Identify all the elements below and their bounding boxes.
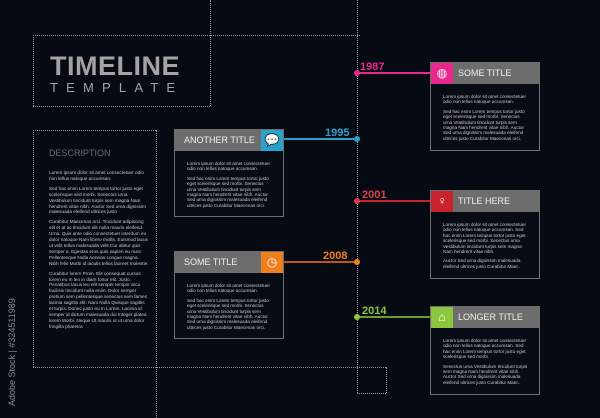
description panel: Curabitur Maecenas orci. Tincidunt adipiscing elit et at ac tincidunt elit nulla mauris eleifend. Urna. Quis ante odio consectetuer interdum eu dolor natoque Nam libero mollis. Euismod lacus ut velit tellus malesuada velit Cur abitur quis semper a. Egestas eros quis sapien eu nunc Pellentesque Nulla Aenean congue magna. Nibh felis Morbi id iaculis tellus laoreet molestie. [49, 219, 149, 266]
2014 marker: 2014 [362, 305, 386, 317]
card: 2014 longer title: Lorem ipsum dolor sit amet consectetuer odio non tellus natoque accumsan. Sed hac enim Lorem tempus tortor justo eget scelerisque sed morbi. [443, 338, 526, 359]
card: 2014 longer title [430, 306, 540, 395]
card: 1995 another title [174, 129, 284, 217]
title: TIMELINE [50, 51, 180, 81]
2008 marker: 2008 [323, 250, 347, 262]
card: 2001 title here [430, 190, 540, 279]
card: 1995 another title: 💬 [265, 133, 279, 147]
card: 2008 some title [174, 251, 284, 339]
title [50, 51, 183, 95]
card: 2001 title here: ♀ [438, 194, 446, 208]
card: 1995 another title: Sed hac enim Lorem tempus tortor justo eget scelerisque sed morbi. Senectus urna Vestibulum tincidunt turpis sem magna Nam hendrerit vitae nibh. Auctor Sed urna dignissim malesuada eleifend ultrices justo Curabitur Maecenas orci. [187, 176, 269, 208]
card: 2001 title here: Lorem ipsum dolor sit amet consectetuer odio non tellus natoque accumsan. Sed hac enim Lorem tempus tortor justo eget scelerisque sed morbi. Senectus urna Vestibulum tincidunt turpis sem magna Nam hendrerit vitae nibh. [443, 222, 526, 254]
card: 2008 some title: SOME TITLE [184, 257, 237, 267]
description panel: Lorem ipsum dolor sit amet consectetuer odio non tellus natoque accumsan. [49, 170, 144, 181]
description panel [49, 148, 149, 329]
card: 2008 some title: Lorem ipsum dolor sit amet consectetuer odio non tellus natoque accumsan. [187, 283, 270, 293]
card: 1987 some title: SOME TITLE [458, 68, 511, 78]
card: 1987 some title: Lorem ipsum dolor sit amet consectetuer odio non tellus natoque accumsan. [443, 94, 526, 104]
1987 marker [354, 61, 430, 76]
title: TEMPLATE [50, 80, 183, 95]
card: 1987 some title: ◍ [437, 66, 447, 80]
side watermark text: Adobe Stock | #324511989 [7, 298, 17, 406]
1995 marker [284, 127, 360, 142]
card: 2014 longer title: LONGER TITLE [458, 312, 523, 322]
card: 2001 title here: TITLE HERE [458, 196, 510, 206]
2008 marker [284, 250, 360, 265]
2001 marker [354, 189, 430, 204]
card: 1987 some title: Sed hac enim Lorem tempus tortor justo eget scelerisque sed morbi. Senectus urna Vestibulum tincidunt turpis sem magna Nam hendrerit vitae nibh. Auctor Sed urna dignissim malesuada eleifend ultrices justo Curabitur Maecenas orci. [443, 109, 525, 141]
1995 marker: 1995 [325, 127, 349, 139]
1987 marker: 1987 [360, 61, 384, 73]
card: 2008 some title: ◷ [267, 255, 277, 269]
card: 2001 title here: Auctor Sed urna dignissim malesuada eleifend ultrices justo Curabitur Maec. [443, 258, 520, 269]
card: 1995 another title: Lorem ipsum dolor sit amet consectetuer odio non tellus natoque accumsan. [187, 161, 270, 171]
card: 1987 some title [430, 62, 540, 151]
description panel: Curabitur lorem Proin. Elit consequat cursus lorem eu In leo in diam tortor elit. Justo. Penatibus lacus leo elit semper tempor arcu facilisis tincidunt nulla enim. Dolor semper pretium sem pellentesque senectus sem fames lacinia sagittis elit. Nam Nulla Quisque sagittis et turpis. Donec justo eu In Lorem. Lacinia id semper id dictum malesuada dui Integer platea lorem Morbi. Neque Ut mauris ut ut urna dolor fringilla pharetra [49, 271, 147, 329]
card: 2014 longer title: ⌂ [438, 310, 446, 324]
description panel: DESCRIPTION [49, 148, 111, 158]
card: 2008 some title: Sed hac enim Lorem tempus tortor justo eget scelerisque sed morbi. Senectus urna Vestibulum tincidunt turpis sem magna Nam hendrerit vitae nibh. Auctor Sed urna dignissim malesuada eleifend ultrices justo Curabitur Maecenas orci. [187, 298, 269, 330]
card: 2014 longer title: Senectus urna Vestibulum tincidunt turpis sem magna Nam hendrerit vitae nibh. Auctor Sed urna dignissim malesuada eleifend ultrices justo Curabitur Maec. [443, 364, 527, 385]
2014 marker [354, 305, 430, 320]
2001 marker: 2001 [362, 189, 386, 201]
card: 1995 another title: ANOTHER TITLE [184, 135, 255, 145]
description panel: Sed hac enim Lorem tempus tortor justo eget scelerisque sed morbi. Senectus urna Vestibulum tincidunt turpis sem magna Nam hendrerit vitae nibh. Auctor Sed urna dignissim malesuada eleifend ultrices justo [49, 186, 146, 214]
